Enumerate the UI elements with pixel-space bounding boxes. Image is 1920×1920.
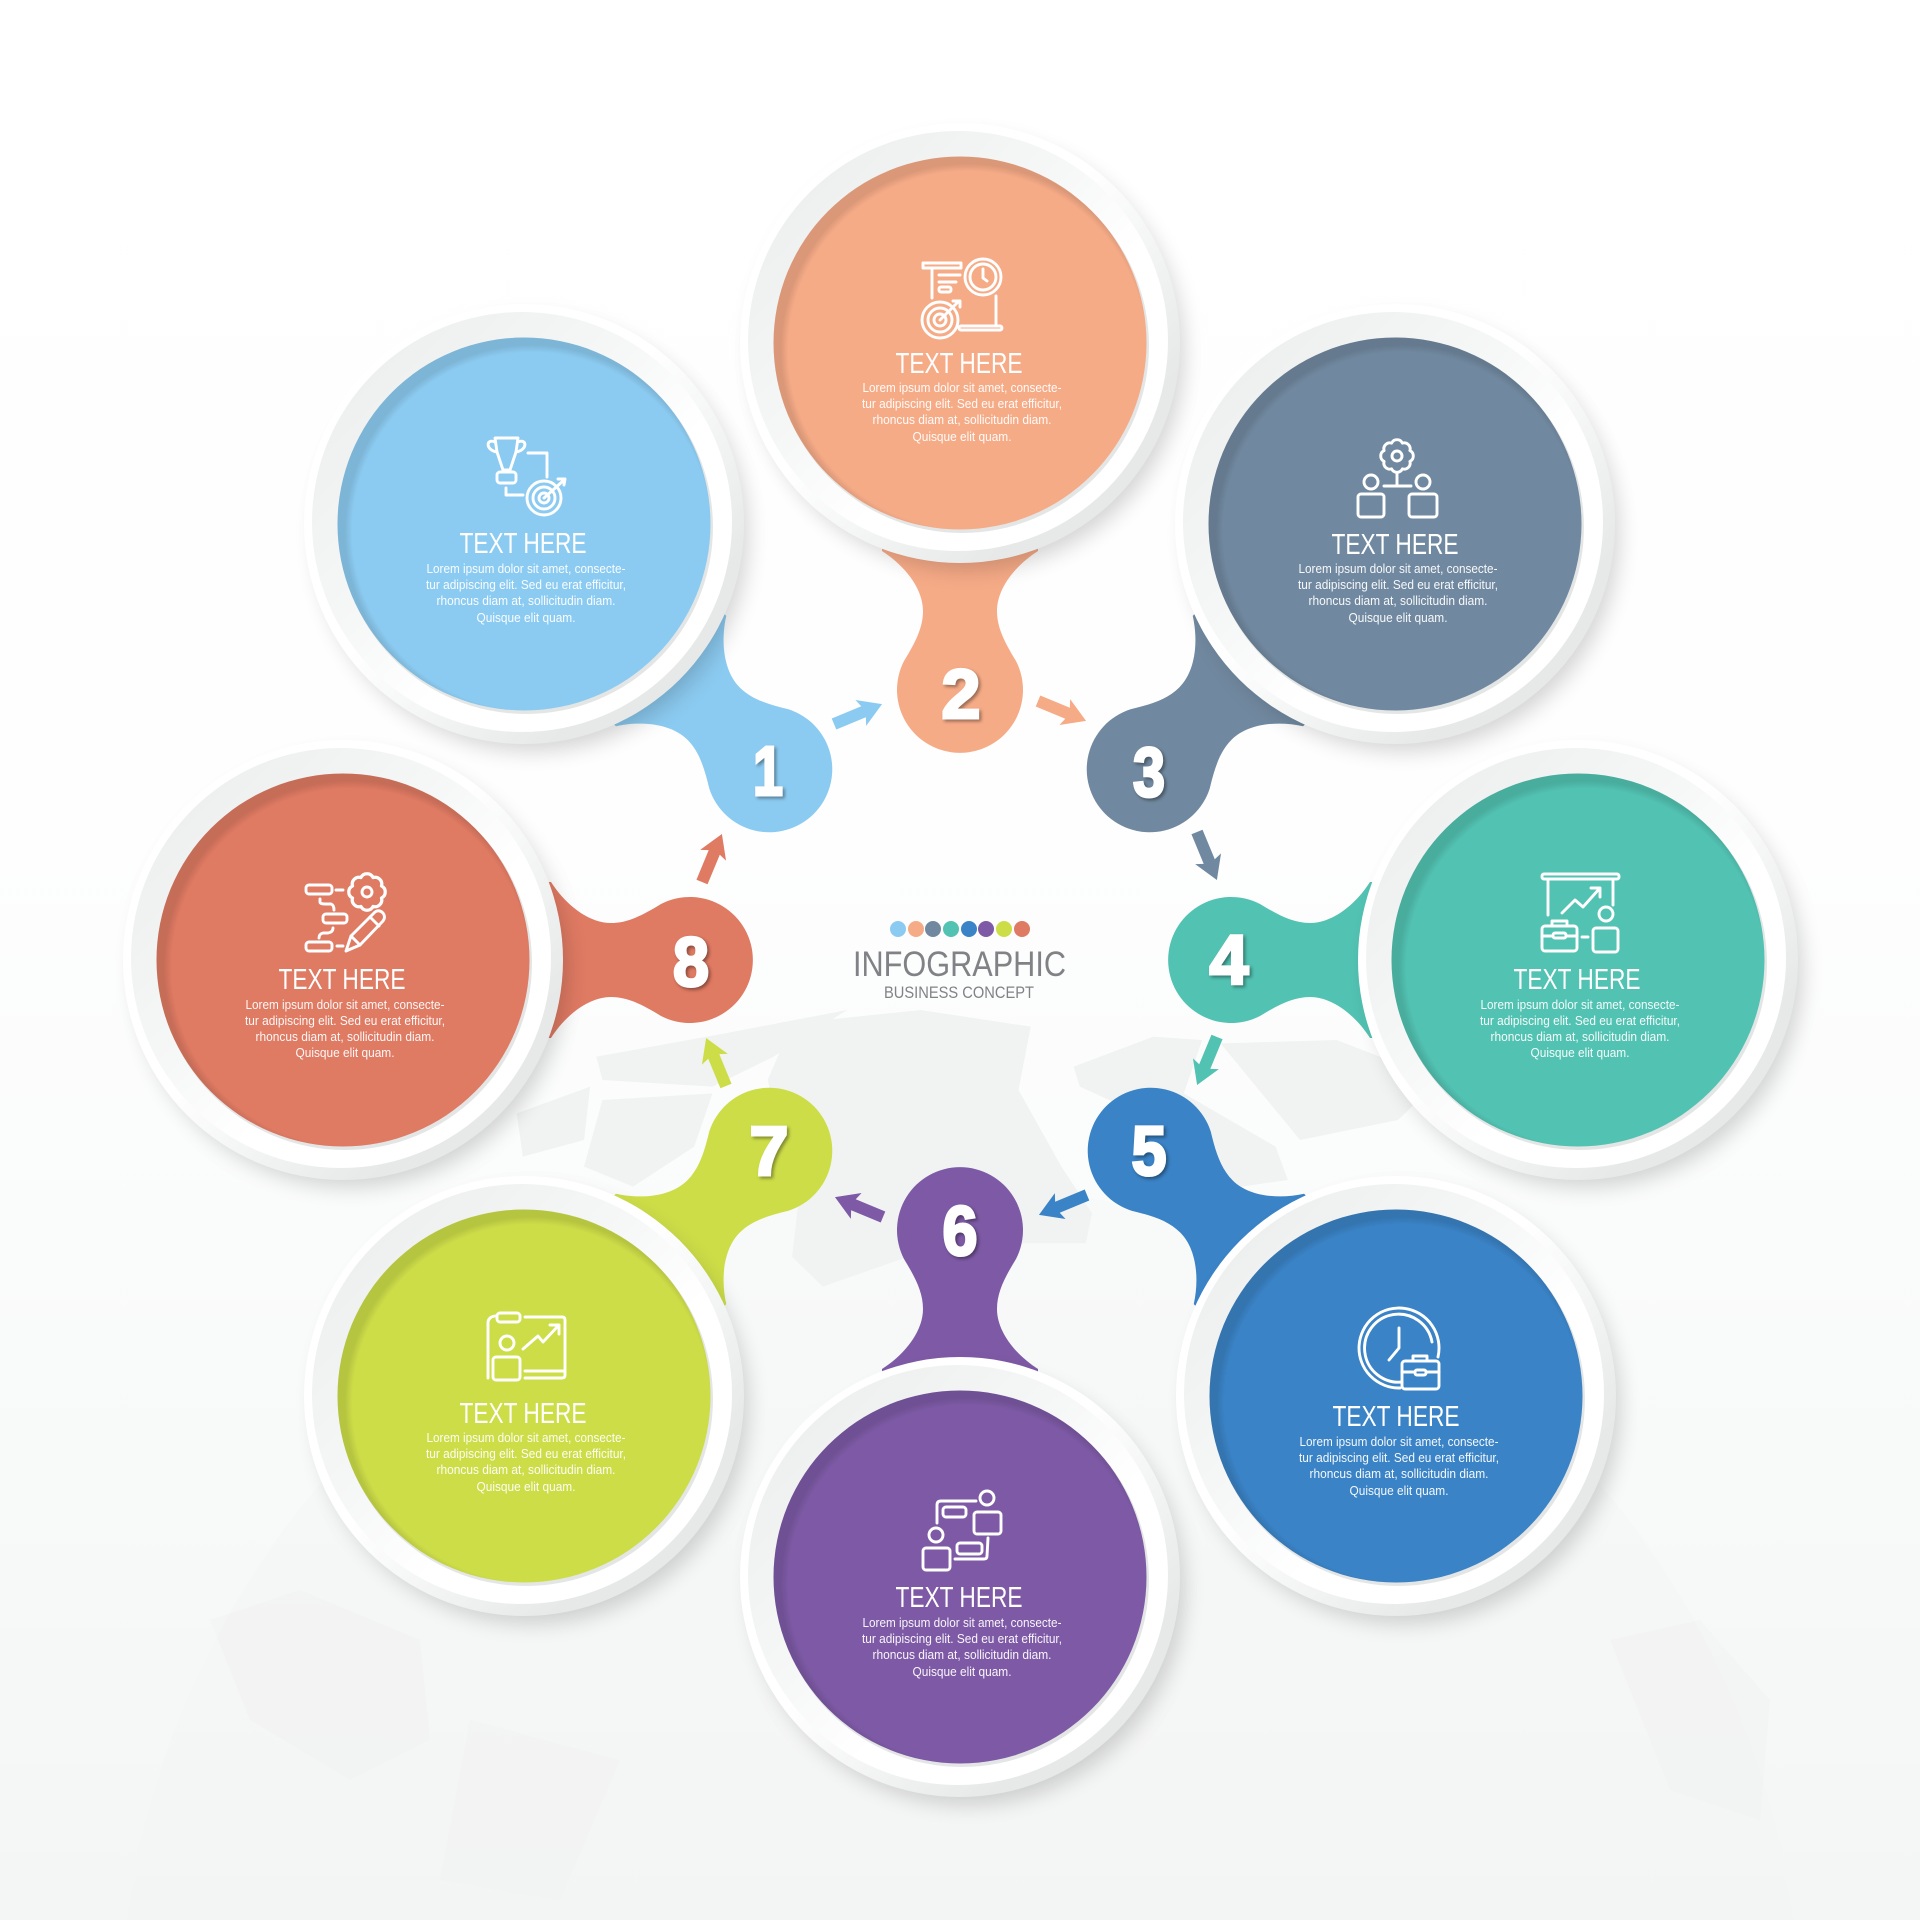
panel 5: blue circle — [1176, 1176, 1620, 1623]
arrow 6 to 7 — [830, 1184, 888, 1230]
description 7: tur adipiscing elit. Sed eu erat efficitur, — [426, 1446, 626, 1461]
description 6: Quisque elit quam. — [912, 1664, 1012, 1679]
description 6: tur adipiscing elit. Sed eu erat efficitur, — [862, 1631, 1062, 1646]
description 8: rhoncus diam at, sollicitudin diam. — [256, 1029, 434, 1044]
description 5: Lorem ipsum dolor sit amet, consecte- — [1300, 1434, 1498, 1449]
number 2: 2 — [942, 655, 980, 733]
description 1: Quisque elit quam. — [476, 610, 576, 625]
title 4: TEXT HERE — [1514, 964, 1640, 996]
icon: clock with briefcase — [1359, 1308, 1439, 1389]
description 2: Lorem ipsum dolor sit amet, consecte- — [862, 380, 1062, 395]
number 3: 3 — [1133, 733, 1165, 811]
description 7: rhoncus diam at, sollicitudin diam. — [436, 1462, 616, 1477]
description 3: tur adipiscing elit. Sed eu erat efficitur, — [1298, 577, 1498, 592]
title 8: TEXT HERE — [278, 964, 406, 996]
description 3: Quisque elit quam. — [1348, 610, 1448, 625]
number 6: 6 — [942, 1192, 978, 1270]
description 5: Quisque elit quam. — [1350, 1483, 1448, 1498]
icon: presentation with briefcase — [1542, 874, 1619, 952]
connector and number 8 — [533, 882, 753, 1038]
description 4 — [1480, 997, 1680, 1060]
description 1: Lorem ipsum dolor sit amet, consecte- — [426, 561, 626, 576]
arrow 8 to 1 — [689, 829, 735, 887]
description 4: rhoncus diam at, sollicitudin diam. — [1490, 1029, 1670, 1044]
description 6: rhoncus diam at, sollicitudin diam. — [872, 1647, 1052, 1662]
panel 4: teal circle — [1358, 740, 1802, 1187]
icon: gear with team — [1358, 440, 1437, 517]
background globe with world map — [127, 1010, 1793, 1920]
centre subheading: BUSINESS CONCEPT — [884, 983, 1034, 1002]
description 1 — [426, 561, 626, 625]
description 3: rhoncus diam at, sollicitudin diam. — [1308, 593, 1488, 608]
panel 8: coral circle — [123, 740, 567, 1187]
title 1: TEXT HERE — [460, 528, 586, 560]
connector and number 4 — [1168, 882, 1388, 1038]
number 1: 1 — [753, 732, 783, 810]
description 1: tur adipiscing elit. Sed eu erat efficitur, — [426, 577, 626, 592]
connector and number 2 — [882, 533, 1038, 753]
arrow 2 to 3 — [1033, 688, 1091, 734]
connector and number 3 — [1050, 603, 1316, 869]
title 3: TEXT HERE — [1332, 529, 1458, 561]
centre heading: INFOGRAPHIC — [853, 945, 1066, 984]
connector and number 7 — [603, 1051, 869, 1317]
description 2: Quisque elit quam. — [912, 429, 1012, 444]
arrow 4 to 5 — [1184, 1032, 1230, 1090]
title 5: TEXT HERE — [1332, 1401, 1460, 1433]
description 7 — [426, 1430, 626, 1494]
number 8: 8 — [673, 923, 709, 1001]
description 3 — [1298, 561, 1498, 625]
centre colour dots — [890, 921, 1030, 937]
panel 1: light blue circle — [304, 304, 748, 751]
description 3: Lorem ipsum dolor sit amet, consecte- — [1298, 561, 1498, 576]
description 6 — [862, 1615, 1062, 1679]
panel 2: peach circle — [740, 123, 1184, 570]
description 2: rhoncus diam at, sollicitudin diam. — [872, 412, 1052, 427]
description 4: Quisque elit quam. — [1530, 1045, 1630, 1060]
description 5 — [1299, 1434, 1499, 1498]
description 7: Lorem ipsum dolor sit amet, consecte- — [426, 1430, 626, 1445]
panel 7: lime circle — [304, 1176, 748, 1623]
connector and number 5 — [1051, 1051, 1317, 1317]
icon: board, clock and target — [922, 259, 1002, 338]
icon: gear, flowchart and pencil — [306, 874, 385, 951]
icon: workflow — [923, 1491, 1001, 1570]
arrow 1 to 2 — [829, 691, 887, 737]
connector and number 1 — [603, 603, 869, 869]
title 6: TEXT HERE — [896, 1582, 1022, 1614]
description 7: Quisque elit quam. — [476, 1479, 576, 1494]
title 7: TEXT HERE — [460, 1398, 586, 1430]
description 5: rhoncus diam at, sollicitudin diam. — [1310, 1466, 1488, 1481]
description 4: Lorem ipsum dolor sit amet, consecte- — [1480, 997, 1680, 1012]
connector and number 6 — [882, 1167, 1038, 1387]
description 8 — [245, 997, 445, 1060]
panel 6: purple circle — [740, 1357, 1184, 1804]
description 1: rhoncus diam at, sollicitudin diam. — [436, 593, 616, 608]
number 7: 7 — [750, 1112, 788, 1190]
description 4: tur adipiscing elit. Sed eu erat efficitur, — [1480, 1013, 1680, 1028]
icon: chart board — [488, 1313, 565, 1380]
description 6: Lorem ipsum dolor sit amet, consecte- — [862, 1615, 1062, 1630]
arrow 5 to 6 — [1034, 1182, 1092, 1228]
description 8: Lorem ipsum dolor sit amet, consecte- — [246, 997, 444, 1012]
arrow 3 to 4 — [1184, 827, 1230, 885]
icon: trophy and target — [488, 438, 565, 515]
description 2 — [862, 380, 1062, 444]
description 5: tur adipiscing elit. Sed eu erat efficitur, — [1299, 1450, 1499, 1465]
number 4: 4 — [1210, 921, 1249, 999]
number 5: 5 — [1132, 1112, 1166, 1190]
description 8: tur adipiscing elit. Sed eu erat efficitur, — [245, 1013, 445, 1028]
description 8: Quisque elit quam. — [296, 1045, 394, 1060]
panel 3: slate circle — [1175, 304, 1619, 751]
arrow 7 to 8 — [693, 1033, 739, 1091]
title 2: TEXT HERE — [896, 348, 1022, 380]
description 2: tur adipiscing elit. Sed eu erat efficitur, — [862, 396, 1062, 411]
